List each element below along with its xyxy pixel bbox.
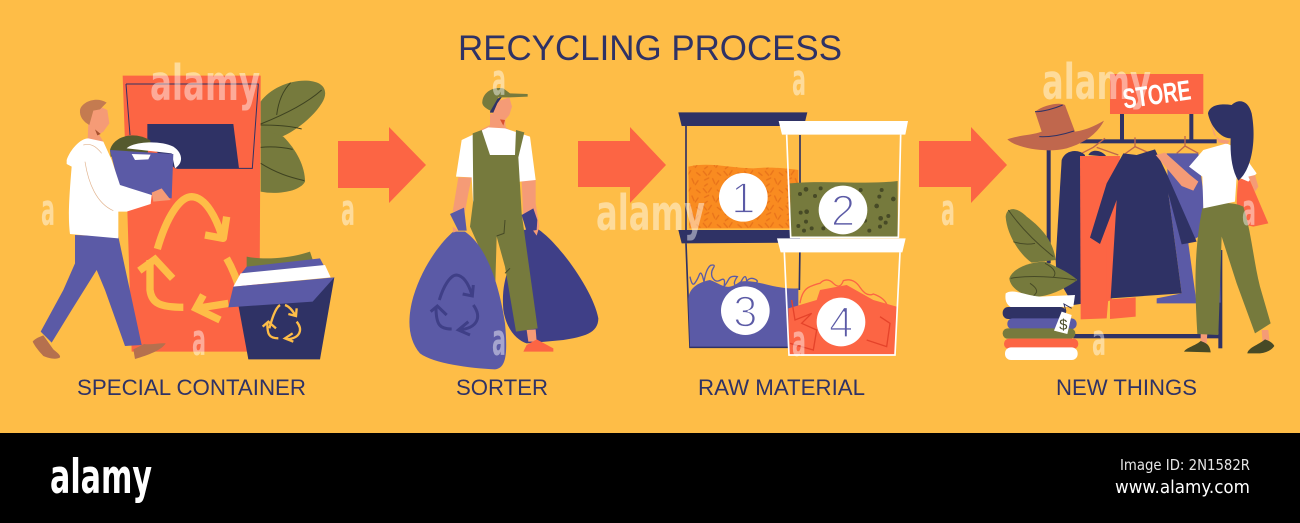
- watermarks: a: [492, 315, 506, 366]
- watermarks: [41, 54, 1256, 367]
- number 4: 4: [829, 300, 853, 348]
- watermarks: a: [941, 185, 955, 236]
- front bag: [409, 208, 506, 369]
- store sign: [1110, 74, 1203, 115]
- illustration: store rack and shopper: [1003, 74, 1274, 360]
- footer bar: [0, 433, 1300, 523]
- watermarks: a: [341, 185, 355, 236]
- container 1: [678, 112, 807, 230]
- icon: recycling arrows on bag: [431, 275, 478, 335]
- watermarks: alamy: [596, 185, 705, 242]
- container 3: [678, 230, 800, 347]
- rack: [1047, 114, 1222, 348]
- worker: [453, 88, 553, 352]
- container 4: [777, 238, 906, 355]
- watermarks: a: [1092, 315, 1106, 366]
- number 1: 1: [731, 175, 755, 223]
- watermarks: a: [41, 185, 55, 236]
- container 2: [779, 121, 908, 237]
- arrow 1: [338, 127, 426, 203]
- label: SPECIAL CONTAINER: [77, 375, 306, 400]
- illustration: four containers: [678, 112, 908, 355]
- icon: leaves: [261, 81, 325, 193]
- recycle bin with clothes: [228, 252, 334, 359]
- label: SORTER: [456, 375, 548, 400]
- panel: new things: [1003, 74, 1274, 400]
- price tag: $: [1059, 317, 1067, 333]
- watermarks: a: [792, 316, 806, 367]
- plant: [1006, 209, 1077, 297]
- watermarks: a: [792, 55, 806, 106]
- person carrying box: [33, 100, 181, 359]
- panel: raw material: [678, 112, 908, 400]
- watermarks: a: [492, 55, 506, 106]
- hangers: [1082, 136, 1198, 155]
- hat: [1007, 104, 1104, 150]
- footer logo: alamy: [50, 450, 152, 505]
- dark bag: [503, 228, 598, 343]
- icon: recycling arrows: [139, 197, 240, 320]
- watermarks: a: [192, 315, 206, 366]
- store sign: STORE: [1121, 74, 1193, 115]
- website: www.alamy.com: [1115, 477, 1250, 498]
- watermarks: alamy: [1042, 54, 1151, 111]
- recycling container: [123, 76, 261, 352]
- arrow 3: [919, 127, 1007, 203]
- shopper: [1156, 101, 1274, 353]
- clothes stack: [1003, 292, 1078, 360]
- number 2: 2: [831, 188, 855, 236]
- panel: sorter: [409, 88, 598, 400]
- label: NEW THINGS: [1056, 375, 1197, 400]
- label: RAW MATERIAL: [698, 375, 865, 400]
- image id: Image ID: 2N1582R: [1120, 456, 1250, 474]
- icon: small recycling arrows: [263, 305, 300, 342]
- panel: special container: [33, 76, 334, 400]
- text: a: [1242, 185, 1256, 236]
- illustration: person and container: [33, 76, 334, 359]
- illustration: worker with bags: [409, 88, 598, 369]
- clothes: [1056, 149, 1221, 319]
- watermarks: alamy: [150, 55, 260, 112]
- number 3: 3: [733, 288, 757, 336]
- title: RECYCLING PROCESS: [458, 29, 842, 68]
- arrow 2: [578, 127, 666, 203]
